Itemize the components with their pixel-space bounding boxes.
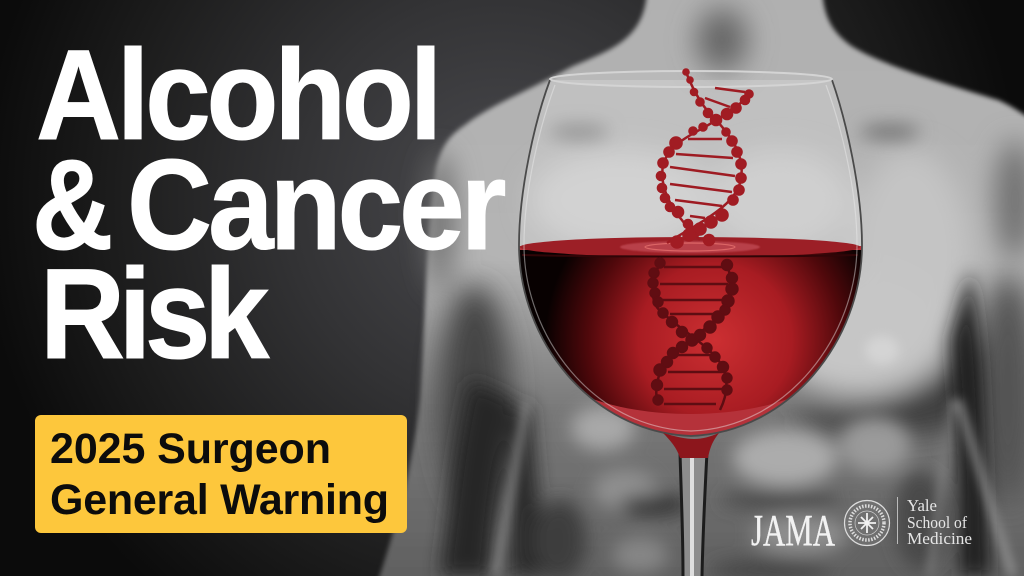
shaded arm and flanks <box>439 285 511 515</box>
glass bowl tint <box>519 80 862 436</box>
glass rim <box>550 71 832 87</box>
divider <box>897 497 898 544</box>
badge: 2025 Surgeon General Warning: General Warning <box>50 476 389 524</box>
glass outline <box>519 80 862 436</box>
Yale School of Medicine wordmark: School of <box>907 513 967 532</box>
title: Risk <box>40 244 270 386</box>
title: & <box>32 133 113 277</box>
logos <box>751 496 972 555</box>
chest creases <box>549 125 609 139</box>
JAMA wordmark: JAMA <box>751 506 835 555</box>
armpit gaps <box>950 270 990 576</box>
abdominal blocks <box>571 406 635 450</box>
Yale seal <box>844 500 890 546</box>
Yale School of Medicine wordmark <box>907 496 972 548</box>
blurred torso photo <box>375 0 1024 576</box>
badge: 2025 Surgeon General Warning: 2025 Surgeon <box>50 425 331 473</box>
title: Alcohol <box>36 25 438 167</box>
wine glass <box>510 71 870 576</box>
title <box>32 25 505 386</box>
DNA helix in air <box>656 69 753 248</box>
Yale School of Medicine wordmark: Yale <box>907 496 937 515</box>
title: Cancer <box>127 135 505 277</box>
badge: 2025 Surgeon General Warning <box>35 415 407 533</box>
DNA helix in wine <box>648 258 738 410</box>
nipple <box>868 338 896 362</box>
Yale School of Medicine wordmark: Medicine <box>907 529 972 548</box>
wine body <box>510 237 870 445</box>
glass stem <box>679 450 708 576</box>
